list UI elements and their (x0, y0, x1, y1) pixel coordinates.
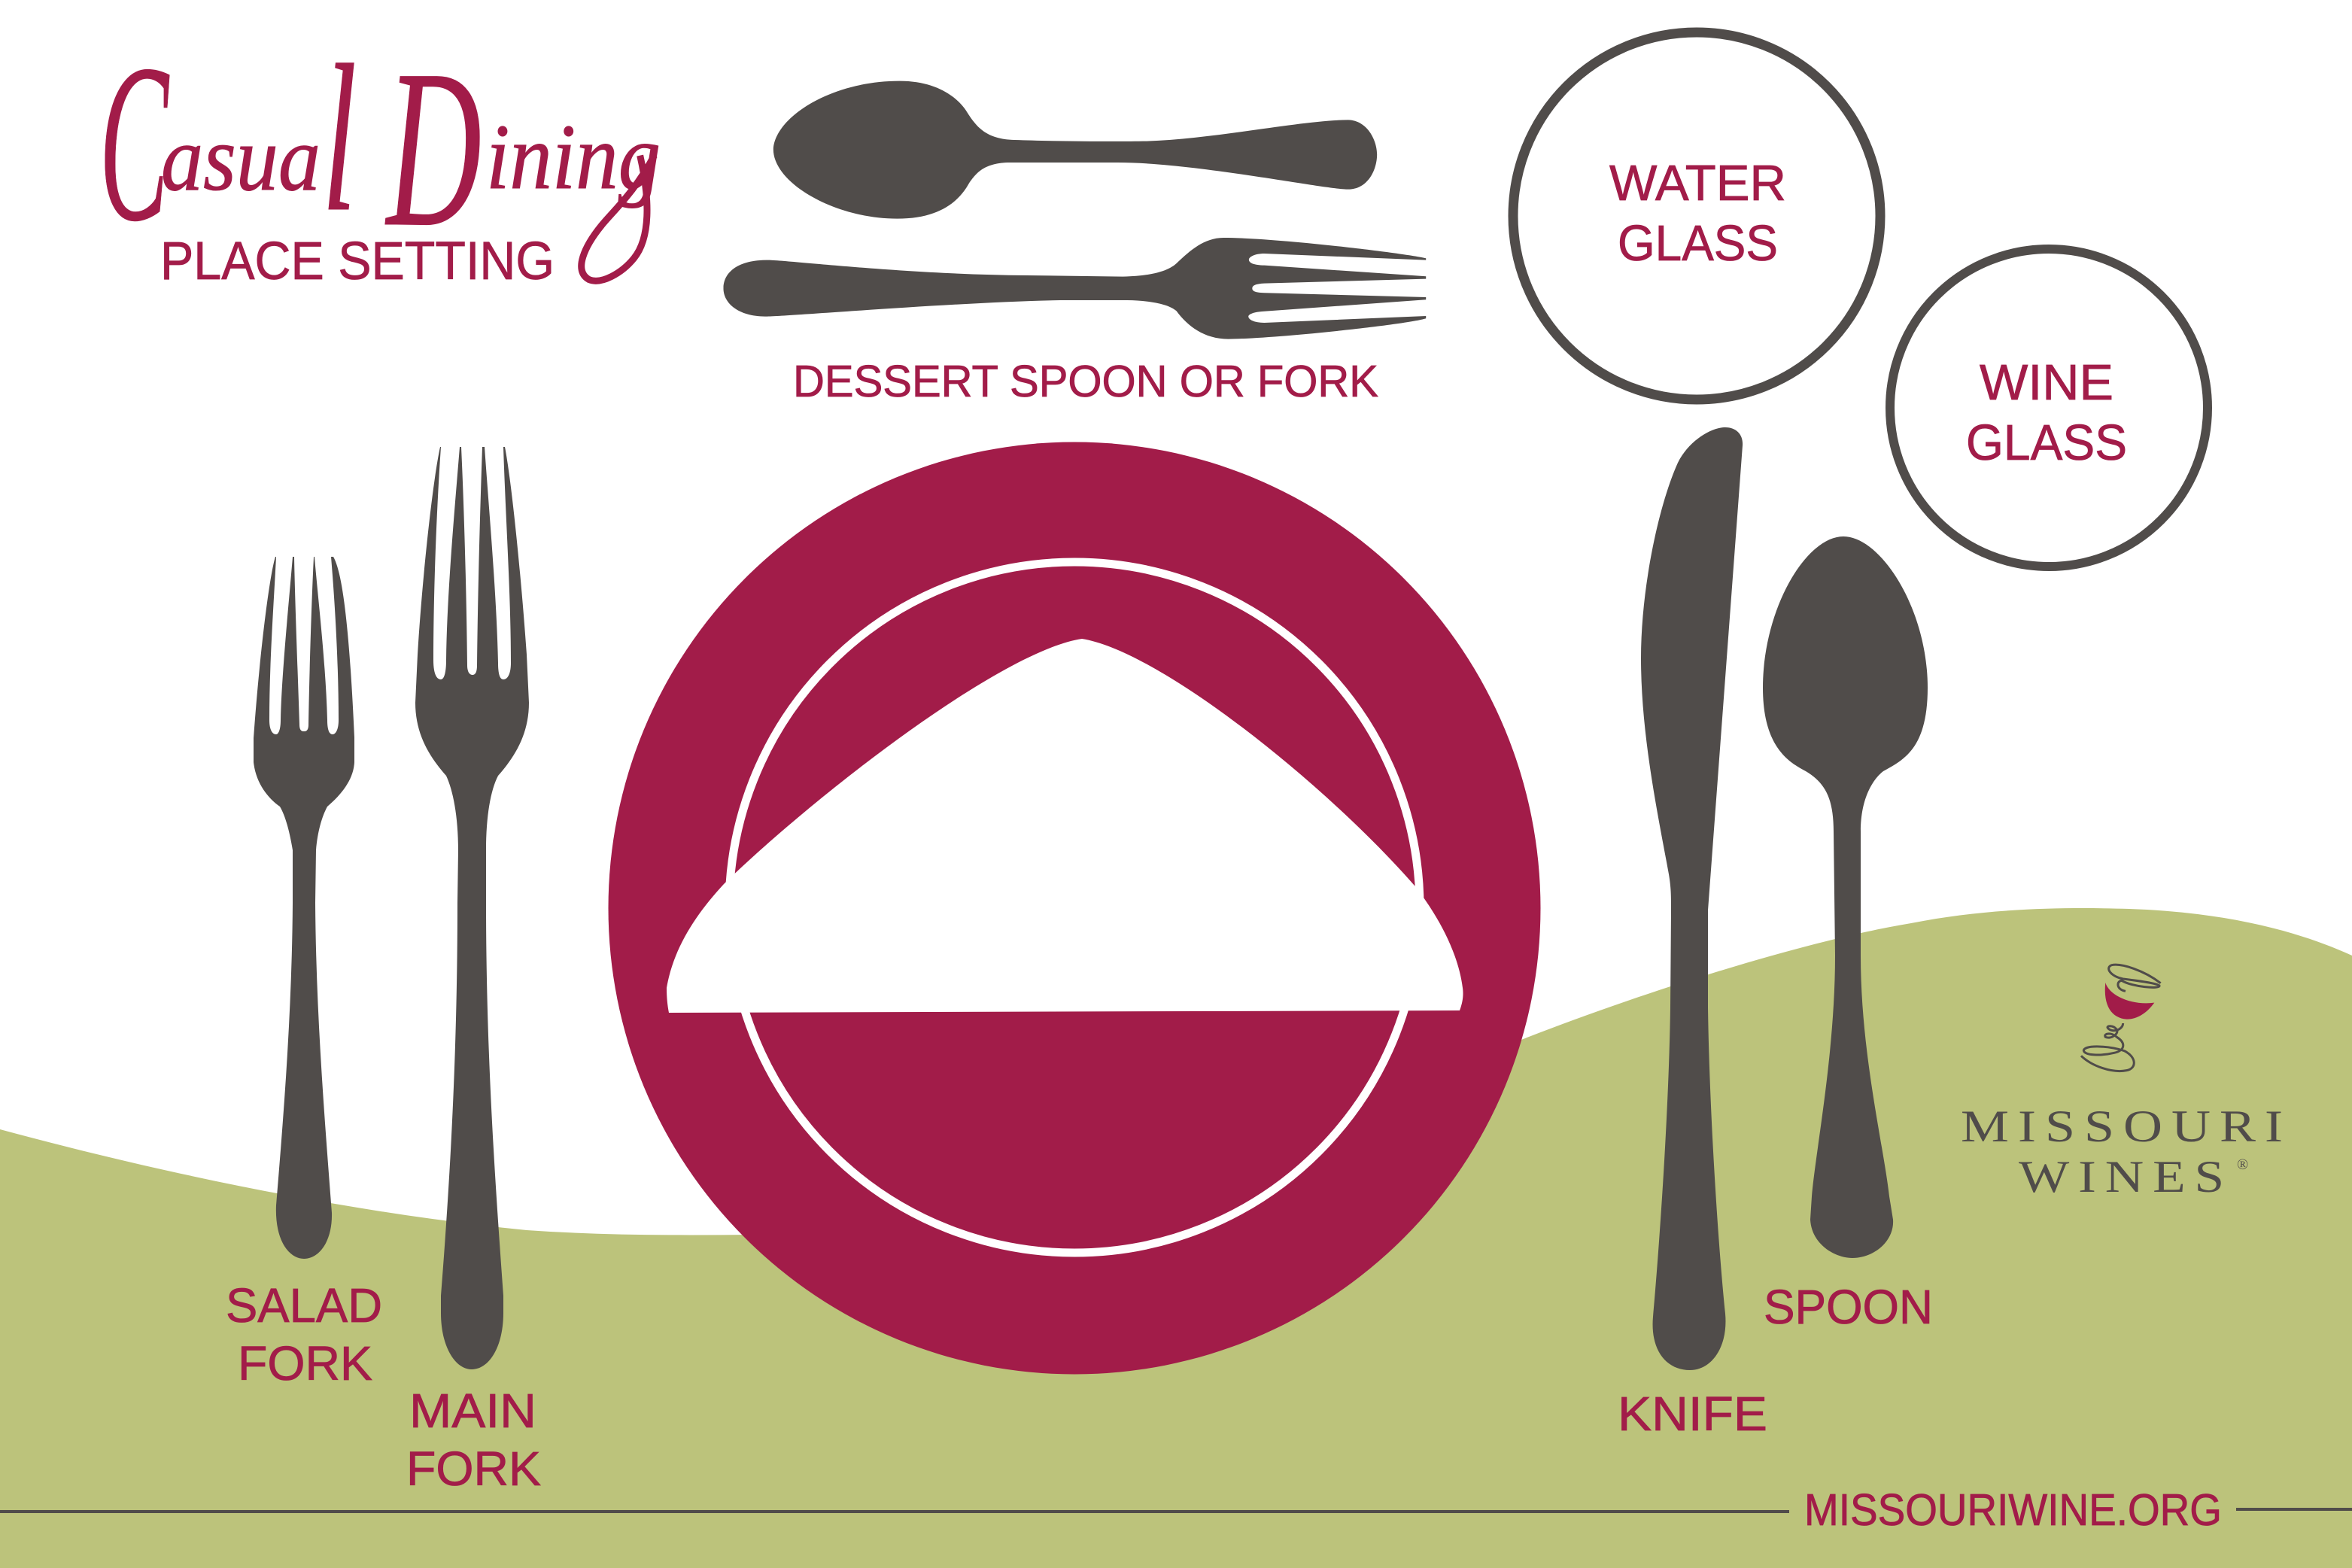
plate disc (608, 442, 1541, 1374)
label: salad fork: FORK (238, 1336, 372, 1390)
title: Casual Dining Place Setting (99, 18, 661, 291)
script heading: C (99, 18, 171, 268)
green hill background (0, 908, 2352, 1568)
footer rule right (2236, 1508, 2352, 1511)
label: knife: KNIFE (1618, 1387, 1767, 1441)
logo wordmark: WINES (2019, 1152, 2233, 1202)
water glass label: GLASS (1618, 215, 1778, 272)
label: salad fork: SALAD (226, 1278, 382, 1332)
script heading: ining (486, 105, 661, 208)
dessert fork (723, 238, 1426, 339)
dinner plate (608, 442, 1541, 1374)
label: main fork (406, 1384, 541, 1496)
footer rule left (0, 1510, 1789, 1513)
wine glass label (1966, 354, 2127, 471)
main fork (415, 447, 529, 1369)
logo wordmark (1961, 1102, 2292, 1202)
script heading (99, 18, 661, 281)
water glass (1513, 32, 1880, 400)
water glass label (1609, 155, 1786, 272)
label: salad fork (226, 1278, 382, 1390)
script heading: l (322, 21, 357, 255)
water glass circle (1513, 32, 1880, 400)
label: spoon: SPOON (1764, 1280, 1933, 1334)
icon: wine glass swirl (2081, 965, 2161, 1071)
wine glass label: WINE (1980, 354, 2113, 411)
dessert spoon (773, 81, 1377, 219)
wine glass label: GLASS (1966, 415, 2127, 471)
water glass label: WATER (1609, 155, 1786, 211)
napkin (667, 639, 1463, 1013)
logo wordmark: ® (2237, 1156, 2248, 1173)
plate inner ring (729, 562, 1420, 1253)
label: main fork: MAIN (409, 1384, 536, 1438)
script heading: asua (161, 107, 321, 210)
label: dessert spoon or fork: DESSERT SPOON OR FORK (793, 357, 1378, 406)
knife (1641, 427, 1743, 1370)
wine glass (1890, 249, 2208, 567)
wine glass circle (1890, 249, 2208, 567)
subheading: PLACE SETTING (160, 232, 555, 291)
logo wordmark: MISSOURI (1961, 1102, 2292, 1151)
script heading: D (354, 23, 482, 273)
label: main fork: FORK (406, 1442, 541, 1496)
salad fork (254, 557, 354, 1259)
spoon (1763, 536, 1928, 1258)
footer url: MISSOURIWINE.ORG (1804, 1485, 2222, 1535)
Missouri Wines logo (1961, 965, 2292, 1202)
